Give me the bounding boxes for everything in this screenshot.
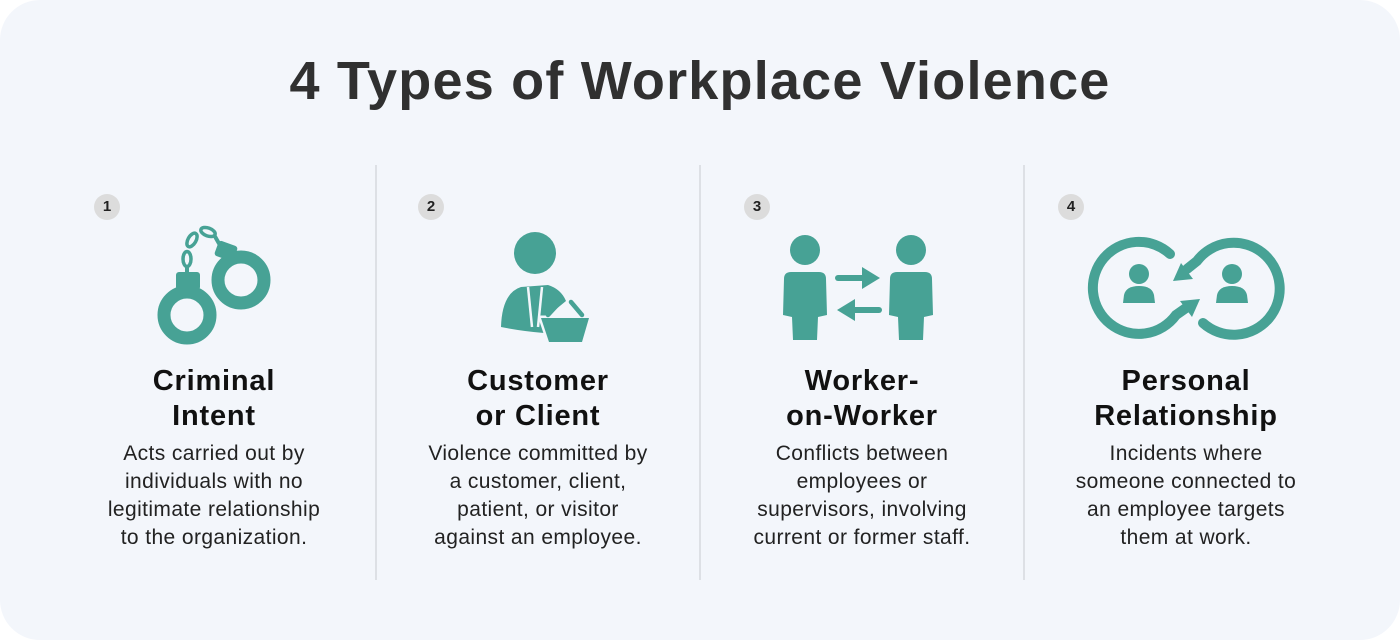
description: employees or xyxy=(797,470,927,493)
description: Violence committed by xyxy=(428,442,648,465)
badge 4 xyxy=(1058,194,1084,220)
badge 3 xyxy=(744,194,770,220)
icon: handcuffs xyxy=(158,226,270,344)
panel: worker-on-worker xyxy=(744,194,970,549)
description: Acts carried out by xyxy=(123,442,305,465)
heading xyxy=(467,365,609,432)
description: a customer, client, xyxy=(450,470,626,493)
panel: personal relationship xyxy=(1058,194,1296,549)
description: Incidents where xyxy=(1109,442,1263,465)
heading: Intent xyxy=(172,400,256,432)
description xyxy=(754,442,970,549)
description: to the organization. xyxy=(121,526,307,549)
badge 1 xyxy=(94,194,120,220)
icon: two workers with arrows xyxy=(783,235,933,340)
description: patient, or visitor xyxy=(457,498,619,521)
icon: customer with basket xyxy=(501,232,589,342)
heading: or Client xyxy=(476,400,600,432)
panel: customer or client xyxy=(418,194,648,549)
description: an employee targets xyxy=(1087,498,1285,521)
badge 3: 3 xyxy=(753,198,761,215)
description: Conflicts between xyxy=(776,442,948,465)
badge 4: 4 xyxy=(1067,198,1075,215)
panel: criminal intent xyxy=(94,194,320,549)
description: against an employee. xyxy=(434,526,642,549)
heading xyxy=(153,365,275,432)
description: them at work. xyxy=(1120,526,1252,549)
icon: two people in infinity loop xyxy=(1088,236,1285,340)
badge 2 xyxy=(418,194,444,220)
heading: Worker- xyxy=(805,365,919,397)
description: supervisors, involving xyxy=(757,498,967,521)
heading: Personal xyxy=(1122,365,1250,397)
heading xyxy=(786,365,938,432)
heading: Customer xyxy=(467,365,609,397)
badge 1: 1 xyxy=(103,198,111,215)
description xyxy=(108,442,320,549)
heading: Criminal xyxy=(153,365,275,397)
description xyxy=(1076,442,1296,549)
heading xyxy=(1094,365,1278,432)
heading: Relationship xyxy=(1094,400,1278,432)
title: 4 Types of Workplace Violence xyxy=(289,51,1111,111)
description: someone connected to xyxy=(1076,470,1296,493)
description: legitimate relationship xyxy=(108,498,320,521)
heading: on-Worker xyxy=(786,400,938,432)
badge 2: 2 xyxy=(427,198,435,215)
description: current or former staff. xyxy=(754,526,970,549)
description: individuals with no xyxy=(125,470,303,493)
description xyxy=(428,442,648,549)
